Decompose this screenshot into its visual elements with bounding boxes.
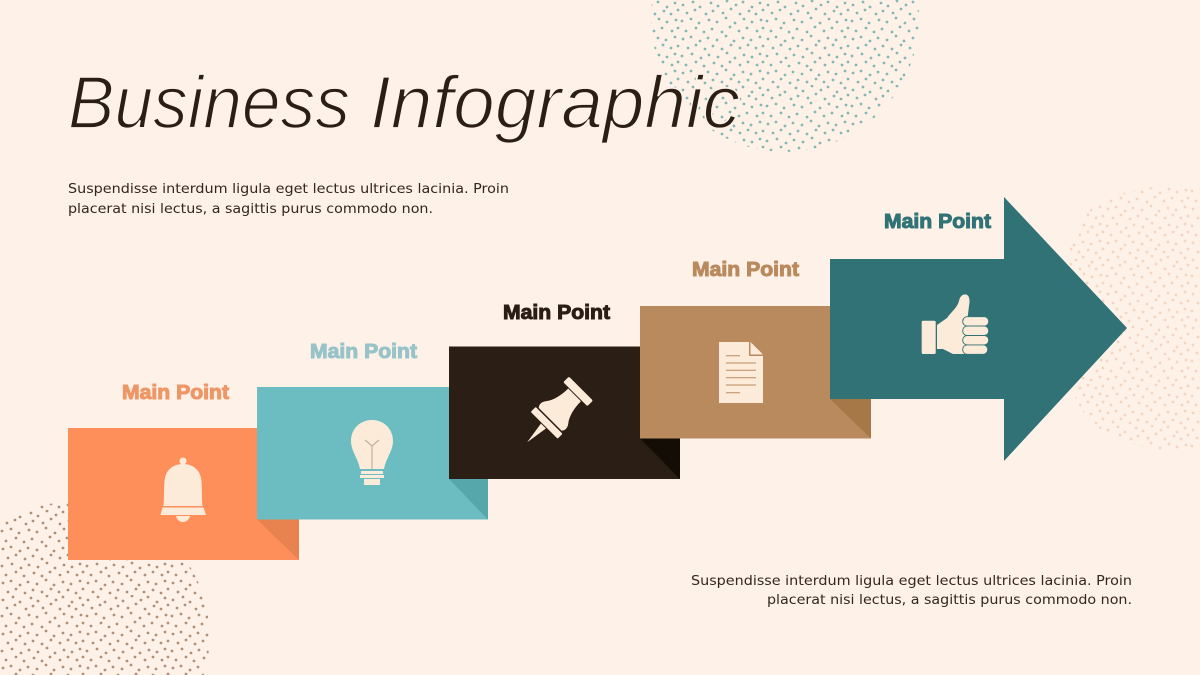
dotted circle: bottom left brown — [0, 502, 210, 675]
fold: brown — [830, 399, 871, 438]
title: Business — [68, 61, 350, 144]
label: step 5: Main Point — [884, 211, 991, 233]
fold: dark — [640, 438, 680, 479]
fold: orange — [257, 520, 299, 560]
title — [68, 61, 740, 144]
bottom text block: placerat nisi lectus, a sagittis purus commodo non. — [767, 592, 1132, 608]
intro text block — [68, 181, 509, 217]
intro text block: placerat nisi lectus, a sagittis purus commodo non. — [68, 201, 433, 217]
icon: bell — [160, 458, 206, 522]
dotted circle: top teal — [651, 0, 919, 152]
icon: push pin — [514, 375, 594, 456]
dotted circle: right peach — [1062, 185, 1200, 452]
icon: light bulb — [351, 420, 393, 485]
label: step 3: Main Point — [503, 302, 610, 324]
fold: blue — [449, 479, 488, 520]
step 2: blue panel — [257, 387, 488, 520]
step 5: teal arrow — [830, 197, 1127, 461]
icon: thumbs up — [922, 294, 989, 354]
bottom text block: Suspendisse interdum ligula eget lectus ultrices lacinia. Proin — [691, 573, 1132, 589]
label: step 2: Main Point — [310, 341, 417, 363]
title: Infographic — [370, 61, 740, 144]
label: step 1: Main Point — [122, 382, 229, 404]
label: step 4: Main Point — [692, 259, 799, 281]
step 1: orange panel — [68, 428, 299, 560]
bottom text block — [691, 573, 1132, 608]
icon: document — [719, 342, 763, 403]
step 4: brown panel — [640, 306, 871, 438]
intro text block: Suspendisse interdum ligula eget lectus ultrices lacinia. Proin — [68, 181, 509, 197]
step 3: dark panel — [449, 346, 680, 479]
